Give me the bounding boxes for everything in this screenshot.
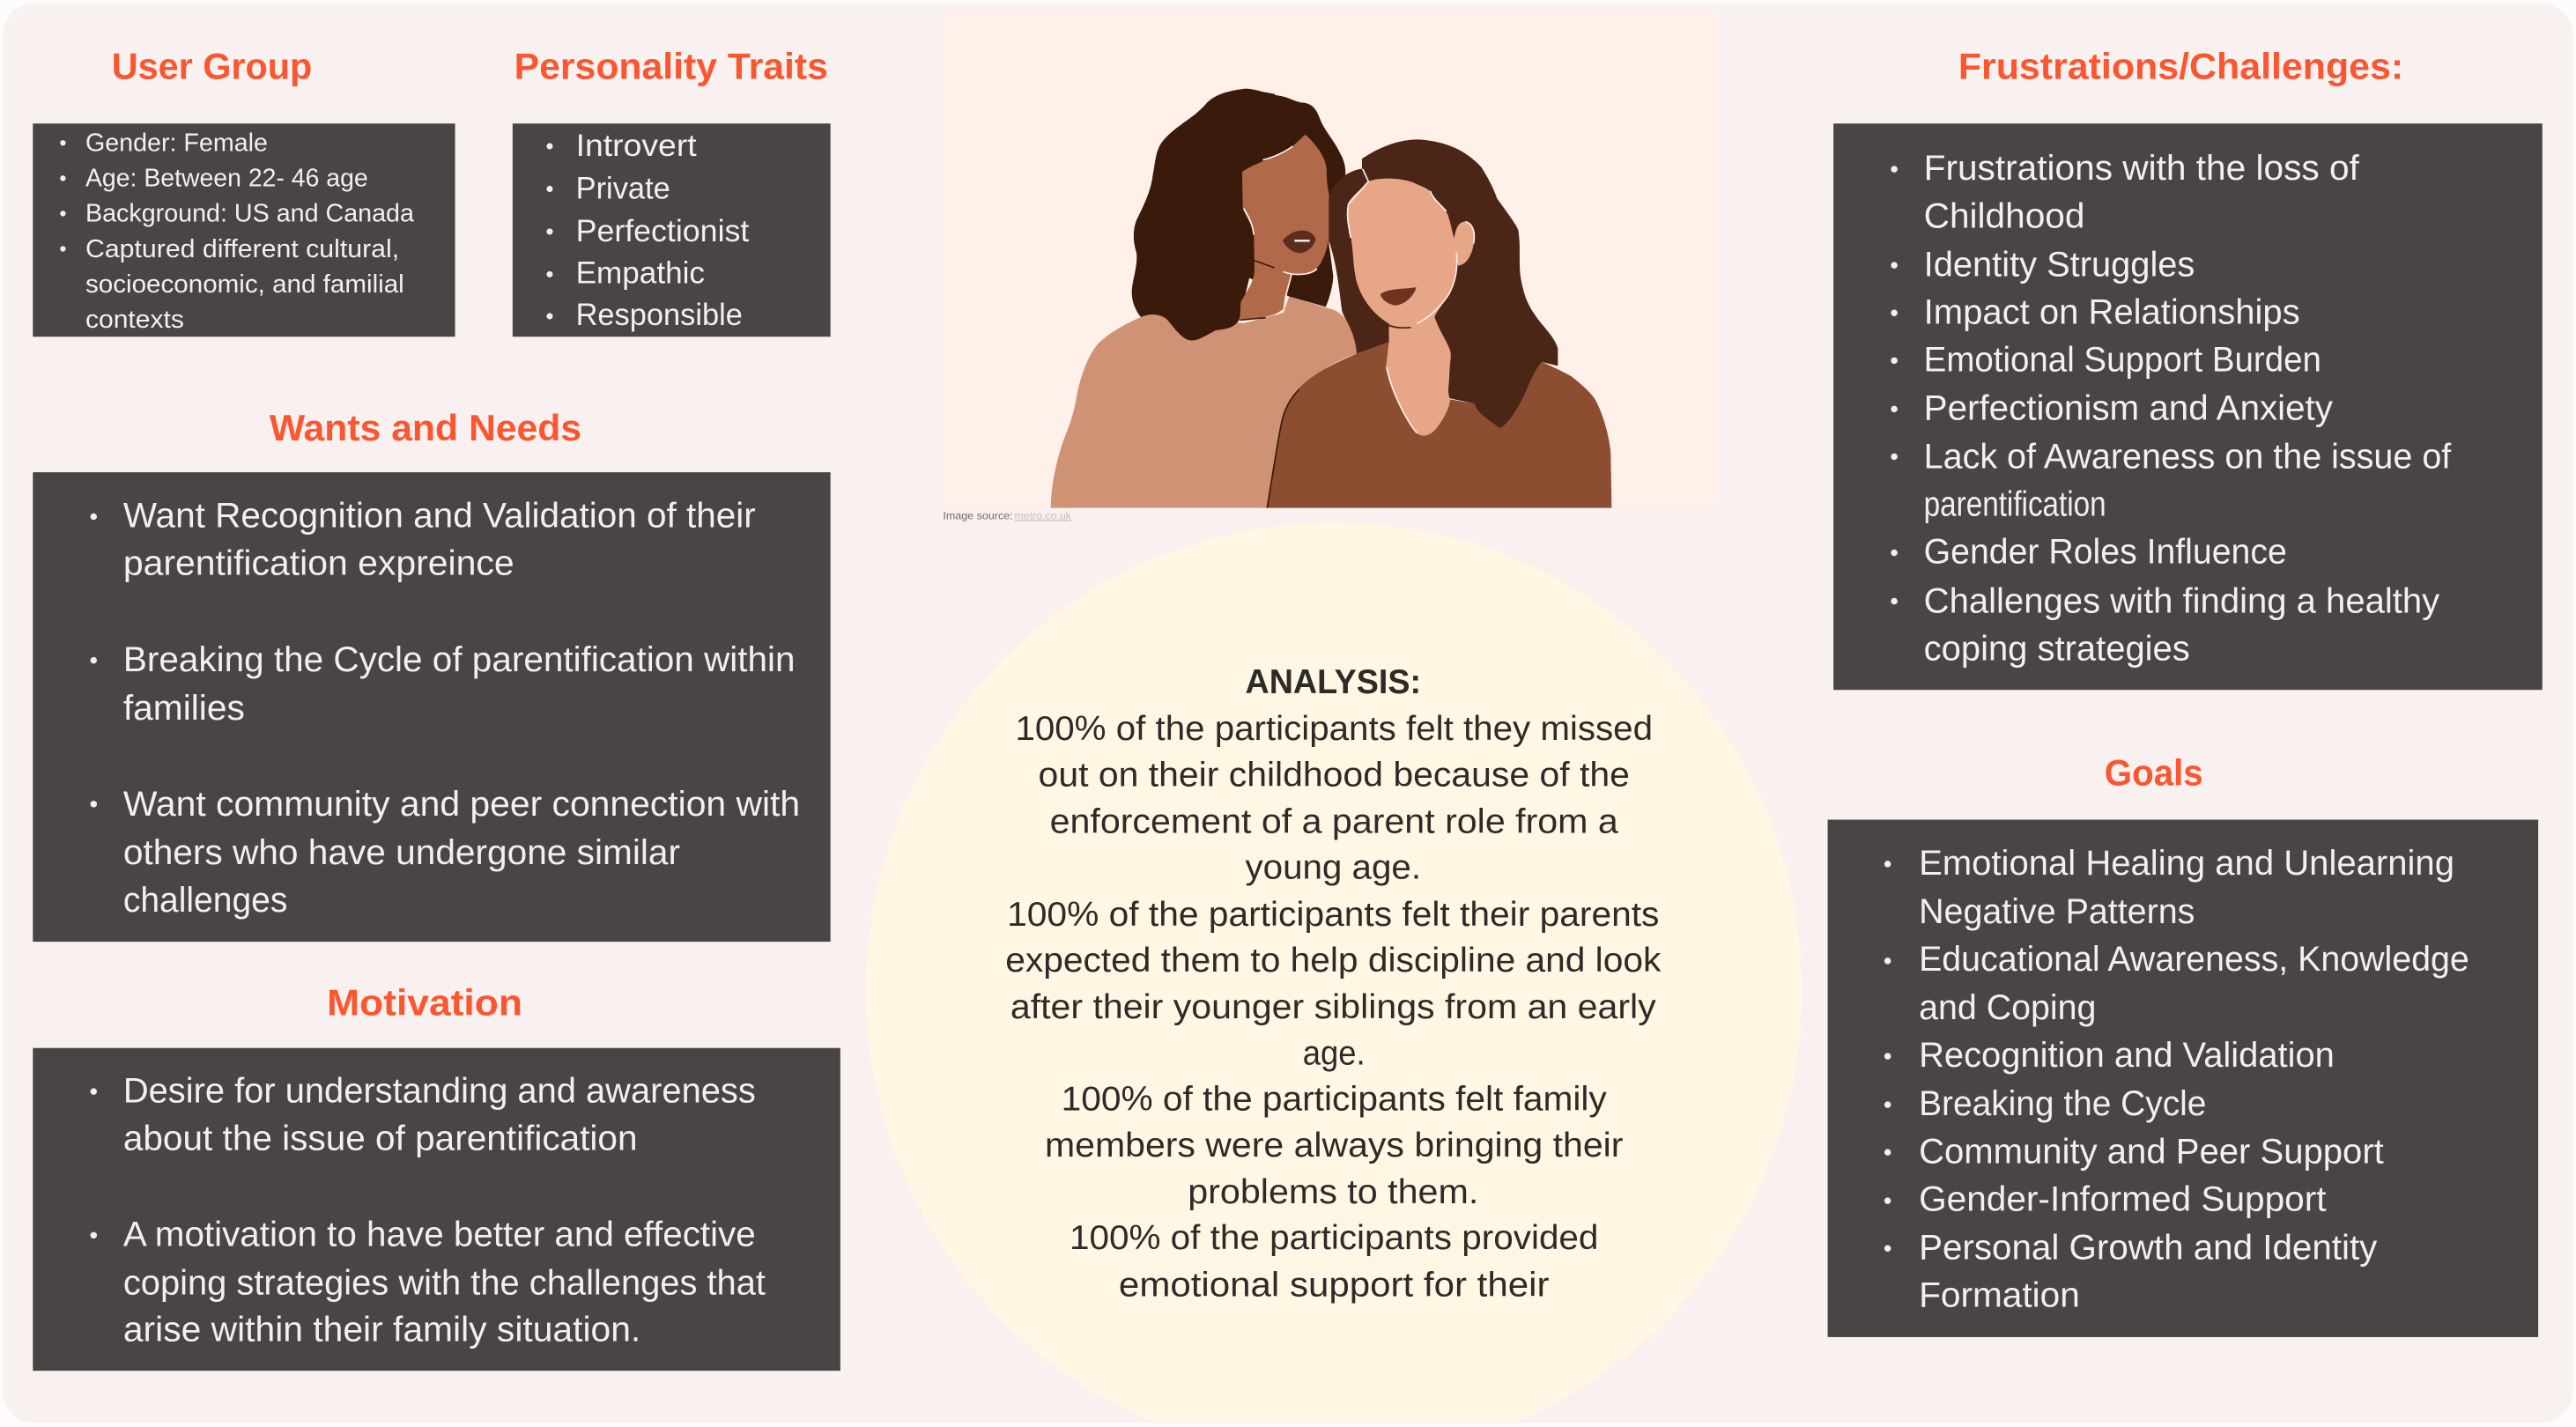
panel: goals: and Coping	[1919, 988, 2096, 1027]
panel: motivation: coping strategies with the challenges that	[123, 1263, 766, 1302]
analysis text: young age.	[1246, 849, 1421, 887]
panel: goals: Community and Peer Support	[1919, 1132, 2384, 1171]
panel: frustrations and challenges: Gender Roles Influence	[1924, 533, 2287, 572]
panel: wants and needs: challenges	[123, 881, 287, 920]
panel: personality traits: Responsible	[576, 297, 743, 332]
panel: motivation: arise within their family situation.	[123, 1311, 640, 1349]
panel: wants and needs: families	[123, 689, 245, 728]
panel: frustrations and challenges: coping strategies	[1924, 630, 2190, 669]
panel: goals: Breaking the Cycle	[1919, 1084, 2206, 1123]
analysis text: 100% of the participants felt their parents	[1007, 896, 1659, 934]
analysis circle	[866, 522, 1802, 1427]
panel: frustrations and challenges: parentification	[1924, 485, 2106, 524]
panel: personality traits: Introvert	[576, 128, 697, 163]
analysis text	[1005, 663, 1662, 1304]
heading: Goals: Goals	[2105, 751, 2203, 793]
heading: User Group: User Group	[112, 46, 312, 87]
panel: wants and needs: parentification expreince	[123, 544, 514, 583]
analysis text: ANALYSIS:	[1246, 663, 1421, 701]
panel: frustrations and challenges	[1833, 123, 2543, 690]
panel: motivation: A motivation to have better and effective	[123, 1215, 756, 1253]
image credit: metro.co.uk	[1015, 511, 1071, 521]
panel: frustrations and challenges: Challenges with finding a healthy	[1924, 582, 2439, 621]
panel: goals: Emotional Healing and Unlearning	[1919, 844, 2454, 883]
panel: frustrations and challenges: Emotional Support Burden	[1924, 340, 2321, 379]
panel: wants and needs: others who have undergone similar	[123, 833, 680, 872]
analysis text: enforcement of a parent role from a	[1050, 802, 1618, 840]
panel: user group: Background: US and Canada	[85, 200, 415, 228]
panel: user group: socioeconomic, and familial	[85, 270, 404, 299]
panel: frustrations and challenges: Lack of Awareness on the issue of	[1924, 437, 2452, 476]
panel: wants and needs	[33, 472, 831, 942]
panel: frustrations and challenges: Identity Struggles	[1924, 245, 2195, 284]
illustration: two women	[943, 14, 1719, 508]
heading: Motivation: Motivation	[327, 981, 522, 1023]
panel: motivation: about the issue of parentification	[123, 1119, 638, 1157]
panel: personality traits: Perfectionist	[576, 213, 749, 248]
panel: user group: Gender: Female	[85, 129, 268, 158]
analysis text: problems to them.	[1188, 1173, 1478, 1211]
analysis text: 100% of the participants felt they missed	[1015, 710, 1653, 748]
analysis text: members were always bringing their	[1045, 1127, 1623, 1165]
panel: goals: Recognition and Validation	[1919, 1036, 2335, 1075]
panel: goals: Gender-Informed Support	[1919, 1179, 2327, 1218]
image credit: Image source:	[943, 511, 1013, 521]
heading: Wants and Needs: Wants and Needs	[270, 407, 581, 448]
heading: Frustrations/Challenges: Frustrations/Challenges:	[1958, 46, 2403, 87]
analysis text: out on their childhood because of the	[1039, 756, 1630, 794]
panel: goals: Educational Awareness, Knowledge	[1919, 940, 2469, 979]
analysis text: 100% of the participants felt family	[1062, 1081, 1607, 1119]
panel: frustrations and challenges: Perfectionism and Anxiety	[1924, 388, 2333, 427]
panel: goals	[1828, 820, 2538, 1337]
panel: wants and needs: Want community and peer connection with	[123, 785, 800, 824]
panel: goals: Formation	[1919, 1275, 2080, 1314]
panel: personality traits: Empathic	[576, 255, 705, 291]
analysis text: emotional support for their	[1119, 1266, 1550, 1304]
panel: goals: Negative Patterns	[1919, 892, 2195, 931]
panel: user group: Captured different cultural,	[85, 235, 399, 263]
image credit	[943, 511, 1071, 521]
panel: frustrations and challenges: Impact on Relationships	[1924, 292, 2300, 331]
panel: goals: Personal Growth and Identity	[1919, 1228, 2377, 1267]
analysis text: expected them to help discipline and look	[1005, 942, 1662, 980]
panel: motivation	[33, 1048, 840, 1371]
panel: personality traits: Private	[576, 171, 670, 206]
heading: Personality Traits: Personality Traits	[514, 46, 828, 87]
analysis text: after their younger siblings from an early	[1010, 988, 1656, 1026]
panel: motivation: Desire for understanding and awareness	[123, 1071, 756, 1110]
panel: wants and needs: Breaking the Cycle of parentification within	[123, 640, 796, 679]
panel: user group: Age: Between 22- 46 age	[85, 165, 368, 193]
panel: wants and needs: Want Recognition and Validation of their	[123, 497, 756, 536]
panel: frustrations and challenges: Frustrations with the loss of	[1924, 149, 2360, 188]
panel: user group	[33, 123, 455, 336]
panel: personality traits	[513, 123, 831, 336]
panel: frustrations and challenges: Childhood	[1924, 196, 2084, 235]
panel: user group: contexts	[85, 306, 184, 334]
analysis text: 100% of the participants provided	[1070, 1219, 1598, 1257]
analysis text: age.	[1303, 1034, 1366, 1072]
